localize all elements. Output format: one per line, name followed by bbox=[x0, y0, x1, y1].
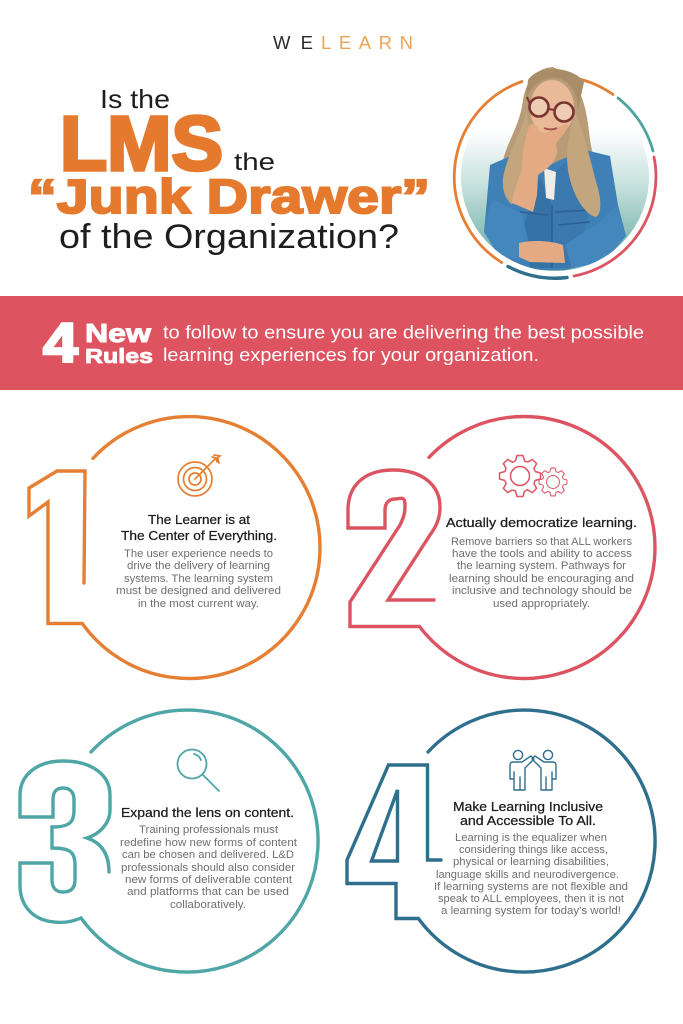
logo: WeLearn bbox=[273, 32, 413, 53]
body text: used appropriately. bbox=[493, 598, 590, 610]
ring: red arc bbox=[574, 157, 656, 276]
body text: the learning system. Pathways for bbox=[457, 560, 626, 572]
body text: a learning system for today's world! bbox=[441, 905, 621, 917]
heading: The Learner is at bbox=[148, 513, 251, 527]
body text: have the tools and ability to access bbox=[452, 548, 632, 560]
woman illustration bbox=[484, 67, 626, 270]
body text: and platforms that can be used bbox=[127, 886, 289, 898]
body text bbox=[120, 824, 297, 911]
banner: 4 new rules: learning experiences for your organization. bbox=[163, 344, 539, 365]
panel: rule 1 bbox=[29, 417, 320, 679]
heading: Expand the lens on content. bbox=[121, 806, 294, 820]
heading bbox=[453, 800, 603, 828]
icon: two people high five bbox=[510, 750, 556, 790]
title bbox=[28, 84, 430, 256]
body text: Training professionals must bbox=[139, 824, 278, 836]
body text: must be designed and delivered bbox=[116, 585, 281, 597]
body text: inclusive and technology should be bbox=[452, 585, 632, 597]
body text: drive the delivery of learning bbox=[127, 560, 270, 572]
panel: rule 2 bbox=[348, 417, 655, 679]
numeral 1 and circle outline bbox=[29, 417, 320, 679]
ring: orange arc bbox=[454, 78, 613, 262]
numeral 4 inner triangle bbox=[372, 790, 398, 861]
heading: Make Learning Inclusive bbox=[453, 800, 603, 814]
heading: The Center of Everything. bbox=[121, 529, 277, 543]
body text: systems. The learning system bbox=[124, 573, 273, 585]
banner: 4 new rules: Rules bbox=[85, 345, 153, 368]
ring: teal arc bbox=[618, 98, 653, 151]
logo: WeLearn: LEARN bbox=[321, 32, 413, 53]
body text: considering things like access, bbox=[459, 844, 608, 856]
title: of the Organization? bbox=[59, 218, 399, 256]
body text bbox=[116, 548, 281, 610]
panel: rule 4 bbox=[347, 710, 655, 972]
icon: gears bbox=[500, 456, 567, 496]
body text: Learning is the equalizer when bbox=[455, 832, 607, 844]
banner: 4 new rules: New bbox=[85, 318, 152, 348]
body text: Remove barriers so that ALL workers bbox=[451, 536, 632, 548]
body text: new forms of deliverable content bbox=[125, 874, 292, 886]
ring: blue arc bbox=[508, 266, 567, 278]
panel: rule 3 bbox=[20, 710, 318, 972]
body text: speak to ALL employees, then it is not bbox=[438, 893, 624, 905]
heading bbox=[121, 513, 277, 543]
body text: can be chosen and delivered. L&D bbox=[122, 849, 294, 861]
body text bbox=[449, 536, 634, 610]
numeral 3 and circle outline bbox=[20, 710, 318, 972]
body text bbox=[434, 832, 628, 917]
body text: learning should be encouraging and bbox=[449, 573, 634, 585]
body text: redefine how new forms of content bbox=[120, 837, 297, 849]
body text: The user experience needs to bbox=[124, 548, 273, 560]
heading: Actually democratize learning. bbox=[446, 516, 637, 530]
title: “Junk Drawer” bbox=[28, 171, 430, 224]
numeral 4 and circle outline bbox=[347, 710, 655, 972]
body text: physical or learning disabilities, bbox=[453, 856, 609, 868]
title: Is the bbox=[100, 84, 170, 114]
body text: If learning systems are not flexible and bbox=[434, 881, 628, 893]
numeral 2 and circle outline bbox=[348, 417, 655, 679]
photo background circle bbox=[461, 83, 649, 271]
portrait: thinking woman in ring bbox=[454, 67, 656, 278]
logo: WeLearn: WE bbox=[273, 32, 313, 53]
body text: language skills and neurodivergence. bbox=[436, 869, 619, 881]
banner: 4 new rules: 4 bbox=[43, 311, 78, 374]
icon: target bbox=[178, 455, 220, 496]
body text: in the most current way. bbox=[138, 598, 259, 610]
body text: professionals should also consider bbox=[121, 862, 295, 874]
title: the bbox=[234, 149, 275, 176]
body text: collaboratively. bbox=[170, 899, 246, 911]
heading: and Accessible To All. bbox=[460, 814, 596, 828]
icon: magnifying glass bbox=[178, 750, 219, 791]
title: LMS bbox=[60, 101, 223, 187]
banner: 4 new rules: to follow to ensure you are delivering the best possible bbox=[163, 322, 644, 342]
banner: 4 new rules bbox=[0, 296, 683, 390]
